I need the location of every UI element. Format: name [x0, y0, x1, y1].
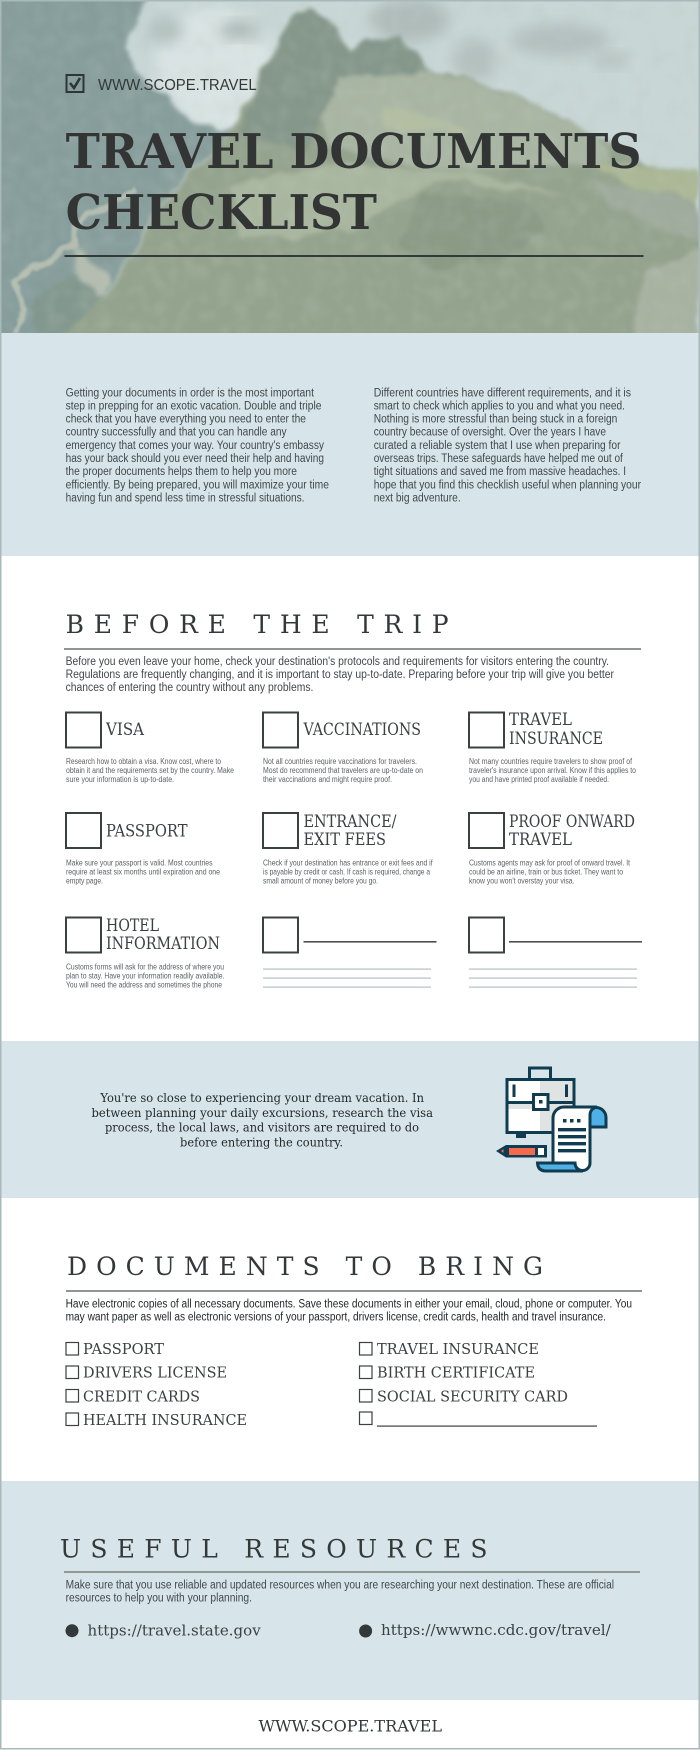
document list left column: CREDIT CARDS	[83, 1389, 200, 1405]
section text: may want paper as well as electronic versions of your passport, drivers license, credit cards, health and travel insurance.	[66, 1311, 606, 1323]
intro text left column: country successfully and that you can handle any	[66, 427, 287, 439]
title	[66, 124, 642, 241]
intro text left column: emergency that comes your way. Your country's embassy	[66, 440, 324, 452]
checklist item: vaccinations: Most do recommend that travelers are up-to-date on	[263, 766, 423, 775]
panel: useful resources	[0, 1481, 700, 1700]
checklist item: entrance and exit fees: small amount of money before you go.	[263, 876, 378, 885]
checklist item: passport: Make sure your passport is valid. Most countries	[66, 858, 212, 867]
title rule	[64, 255, 644, 257]
document list right column: SOCIAL SECURITY CARD	[377, 1389, 568, 1405]
checklist item: visa	[66, 712, 234, 784]
checklist item: visa: sure your information is up-to-date.	[66, 775, 174, 784]
section intro text: Before you even leave your home, check your destination's protocols and requirements for visitors entering the country.	[66, 656, 609, 668]
callout text	[92, 1091, 433, 1150]
checklist item: vaccinations: VACCINATIONS	[303, 720, 421, 739]
document list left column: DRIVERS LICENSE	[83, 1366, 227, 1382]
section intro text: chances of entering the country without any problems.	[66, 682, 313, 694]
checklist item: passport: PASSPORT	[106, 822, 188, 841]
section text	[66, 1579, 614, 1605]
checklist item: visa: VISA	[105, 720, 145, 739]
callout text: process, the local laws, and visitors are required to do	[105, 1121, 419, 1135]
checklist item: hotel information: plan to stay. Have your information readily available.	[66, 972, 224, 981]
checklist item: vaccinations	[263, 712, 423, 784]
intro text left column: having fun and spend less time in stressful situations.	[66, 492, 304, 504]
checklist item: passport: empty page.	[66, 876, 103, 885]
panel: introduction	[0, 333, 700, 556]
document list right column: BIRTH CERTIFICATE	[377, 1366, 535, 1382]
checklist item: travel insurance	[469, 710, 636, 784]
checklist item: entrance and exit fees	[263, 812, 433, 885]
checklist item: proof onward travel	[469, 812, 635, 885]
icon: checked box	[66, 75, 84, 92]
checklist item: visa: Research how to obtain a visa. Know cost, where to	[66, 757, 221, 766]
checklist item: proof onward travel: could be an airline, train or bus ticket. They want to	[469, 867, 623, 876]
intro text right column: next big adventure.	[374, 492, 461, 504]
document list left column: PASSPORT	[83, 1342, 164, 1358]
checklist item: entrance and exit fees: Check if your destination has entrance or exit fees and if	[263, 858, 433, 867]
document list left column	[66, 1342, 247, 1429]
resource link 2: https://wwwnc.cdc.gov/travel/	[381, 1623, 611, 1639]
section intro text: Regulations are frequently changing, and it is important to stay up-to-date. Preparing before your trip will give you better	[66, 669, 614, 681]
intro text right column: smart to check which applies to you and what you need.	[374, 400, 625, 412]
intro text right column: country because of oversight. Over the years I have	[374, 427, 606, 439]
panel: documents to bring	[66, 1252, 642, 1429]
icon: briefcase, document scroll and pencil	[496, 1068, 606, 1171]
checklist item: hotel information: INFORMATION	[106, 934, 220, 953]
header photo: mountain ruins	[0, 0, 700, 345]
intro text right column: hope that you find this checklish useful when planning your	[374, 479, 641, 491]
intro text left column	[66, 387, 329, 504]
intro text left column: check that you have everything you need to enter the	[66, 414, 306, 426]
title: TRAVEL DOCUMENTS	[66, 124, 642, 180]
blank checklist item 1	[263, 918, 436, 988]
checklist item: hotel information: Customs forms will ask for the address of where you	[66, 963, 224, 972]
intro text left column: Getting your documents in order is the most important	[66, 387, 315, 399]
callout text: before entering the country.	[180, 1136, 343, 1150]
panel: header	[66, 75, 642, 241]
section text: Have electronic copies of all necessary documents. Save these documents in either your email, cloud, phone or computer. You	[66, 1298, 632, 1310]
document list right column: TRAVEL INSURANCE	[377, 1342, 539, 1358]
heading: BEFORE THE TRIP	[66, 610, 449, 639]
callout text: You're so close to experiencing your dream vacation. In	[99, 1091, 424, 1105]
heading rule	[64, 648, 641, 650]
checklist item: travel insurance: Not many countries require travelers to show proof of	[469, 757, 633, 766]
section text: resources to help you with your planning.	[66, 1593, 252, 1605]
intro text right column: tight situations and saved me from massive headaches. I	[374, 466, 626, 478]
checklist item: entrance and exit fees: ENTRANCE/	[304, 812, 397, 831]
checklist item: hotel information	[66, 916, 224, 989]
checklist item: travel insurance: traveler's insurance upon arrival. Know if this applies to	[469, 766, 636, 775]
checklist item: entrance and exit fees: EXIT FEES	[304, 830, 386, 849]
checklist item: proof onward travel: TRAVEL	[509, 830, 572, 849]
intro text left column: step in prepping for an exotic vacation. Double and triple	[66, 400, 321, 412]
checklist item: vaccinations: Not all countries require vaccinations for travelers.	[263, 757, 417, 766]
checklist item: entrance and exit fees: is payable by credit or cash. If cash is required, change a	[263, 867, 430, 876]
checklist item: passport: require at least six months until expiration and one	[66, 867, 220, 876]
checklist item: travel insurance: TRAVEL	[509, 710, 572, 729]
footer url: WWW.SCOPE.TRAVEL	[258, 1716, 442, 1736]
heading: DOCUMENTS TO BRING	[67, 1252, 543, 1281]
checklist item: proof onward travel: PROOF ONWARD	[509, 812, 635, 831]
checklist item: proof onward travel: know you won't overstay your visa.	[469, 876, 574, 885]
document list left column: HEALTH INSURANCE	[83, 1413, 247, 1429]
checklist item: hotel information: You will need the address and sometimes the phone	[66, 980, 222, 989]
checklist item: visa: obtain it and the requirements set by the country. Make	[66, 766, 234, 775]
blank checklist item 2	[469, 918, 642, 988]
site url: WWW.SCOPE.TRAVEL	[98, 77, 257, 94]
intro text left column: the proper documents helps them to help you more	[66, 466, 297, 478]
checklist item: hotel information: HOTEL	[106, 916, 159, 935]
intro text right column	[374, 387, 641, 504]
heading rule	[66, 1290, 642, 1292]
intro text right column: Different countries have different requirements, and it is	[374, 387, 631, 399]
checklist item: vaccinations: their vaccinations and might require proof.	[263, 775, 392, 784]
resource link 1: https://travel.state.gov	[88, 1624, 262, 1640]
intro text left column: has your back should you ever need their help and having	[66, 453, 324, 465]
intro text left column: efficiently. By being prepared, you will maximize your time	[66, 479, 329, 491]
heading: USEFUL RESOURCES	[60, 1535, 488, 1564]
panel: callout	[0, 1041, 700, 1198]
intro text right column: curated a reliable system that I use when preparing for	[374, 440, 621, 452]
document list right column	[360, 1342, 597, 1427]
checklist item: proof onward travel: Customs agents may ask for proof of onward travel. It	[469, 858, 631, 867]
checklist item: passport	[66, 813, 220, 885]
heading rule	[64, 1571, 640, 1573]
checklist item: travel insurance: INSURANCE	[509, 729, 603, 748]
intro text right column: Nothing is more stressful than being stuck in a foreign	[374, 414, 617, 426]
section intro text	[66, 656, 614, 694]
intro text right column: overseas trips. These safeguards have helped me out of	[374, 453, 623, 465]
title: CHECKLIST	[66, 185, 377, 241]
panel: before the trip	[64, 610, 642, 989]
checklist item: travel insurance: you and have printed proof available if needed.	[469, 775, 609, 784]
callout text: between planning your daily excursions, research the visa	[92, 1106, 433, 1120]
section text: Make sure that you use reliable and updated resources when you are researching your next destination. These are official	[66, 1579, 614, 1591]
section text	[66, 1298, 632, 1323]
